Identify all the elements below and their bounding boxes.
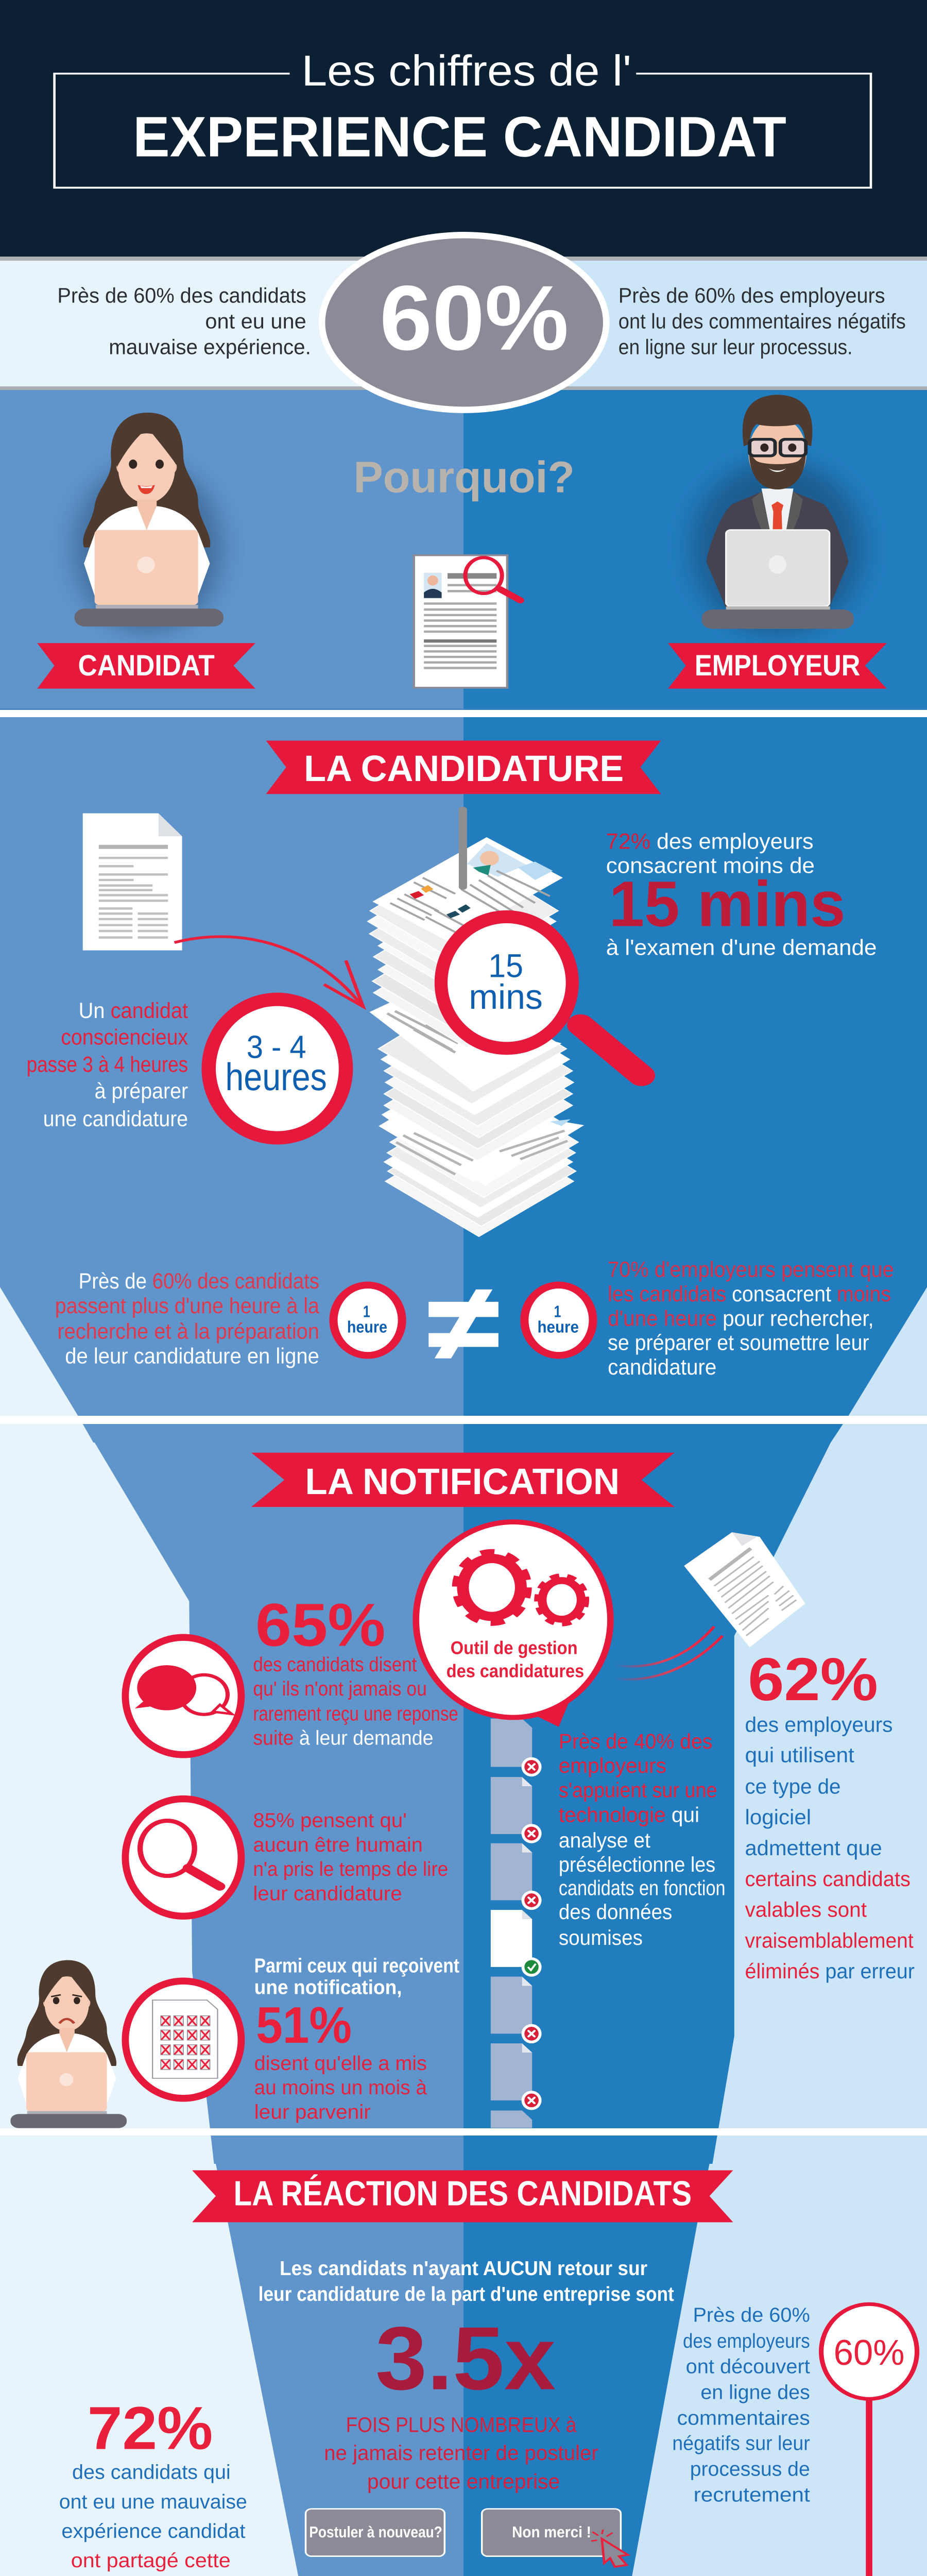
text: 72% employeurs 15 mins [606, 829, 877, 960]
illustration: employer man [692, 395, 863, 635]
heading ribbon: la réaction [192, 2171, 733, 2222]
heading ribbon: la notification: LA NOTIFICATION [305, 1461, 620, 1502]
text: 70% employeurs [608, 1258, 894, 1380]
illustration: sad candidate [10, 1960, 127, 2128]
timeline: 60%: commentaires [677, 2406, 810, 2429]
heading ribbon: la candidature [266, 741, 661, 794]
icon: not equal [428, 1290, 499, 1359]
timeline: 60%: Près de 60% [693, 2303, 810, 2326]
text: 40% employeurs: employeurs [559, 1754, 666, 1777]
text: 40% employeurs: technologie qui [559, 1803, 699, 1827]
stat: 62%: logiciel [745, 1805, 811, 1829]
icon: resume with magnifier [414, 555, 520, 688]
heading ribbon: la notification [251, 1453, 675, 1507]
stat: 62%: 62% [748, 1646, 878, 1713]
stat: 51%: au moins un mois à [254, 2076, 427, 2099]
badge: 3-4 heures: heures [225, 1055, 327, 1098]
timeline: 60%: processus de [690, 2458, 810, 2480]
badge: 1 heure right: heure [538, 1317, 579, 1336]
timeline: 60%: en ligne des [700, 2381, 810, 2403]
text: 40% employeurs: analyse et [559, 1828, 650, 1852]
left band text: ont eu une [205, 309, 306, 333]
left band text [57, 283, 311, 359]
arrow: document to stack [175, 937, 363, 1007]
stat: 51% [254, 1955, 459, 2123]
icon: rejected document [122, 1977, 245, 2102]
heading: pourquoi: Pourquoi? [354, 453, 575, 502]
stat: 72%: expérience candidat [61, 2520, 245, 2543]
text: 85%: leur candidature [253, 1883, 402, 1905]
text: aucun retour [259, 2257, 674, 2306]
button: postuler à nouveau [306, 2509, 444, 2556]
timeline: 60%: des employeurs [683, 2330, 810, 2352]
text: 85%: aucun être humain [253, 1834, 423, 1856]
stat: 51%: leur parvenir [254, 2101, 371, 2123]
column of resumes [491, 1719, 542, 2128]
stat: 62% [745, 1646, 915, 1983]
panel: la réaction des candidats [15, 2171, 917, 2576]
timeline: 60%: négatifs sur leur [672, 2432, 810, 2454]
panel: 60% stat band [57, 232, 906, 413]
title line 1: Les chiffres de l' [301, 46, 631, 95]
badge: 3-4 heures [201, 993, 353, 1144]
text: 60% des candidats: Près de 60% des candidats [79, 1269, 319, 1294]
badge: 1 heure left: 1 [363, 1302, 370, 1320]
text: 60% des candidats: recherche et à la préparation [57, 1319, 319, 1344]
icon: magnifier 15 mins: mins [469, 977, 543, 1016]
stat: 72%: des candidats qui [72, 2461, 231, 2484]
text: 72% employeurs 15 mins: consacrent moins de [606, 854, 815, 878]
right band text [619, 283, 906, 359]
button: non merci: Non merci ! [512, 2523, 591, 2541]
text: 70% employeurs: les candidats consacrent moins [608, 1282, 891, 1307]
text: candidat consciencieux: une candidature [43, 1107, 188, 1131]
60% badge [319, 232, 610, 413]
callout: outil de gestion: Outil de gestion [451, 1638, 578, 1658]
text: 40% employeurs: des données [559, 1900, 672, 1924]
stat: 51%: 51% [256, 1996, 352, 2054]
heading ribbon: la réaction: LA RÉACTION DES CANDIDATS [233, 2174, 692, 2213]
icon: cursor [591, 2530, 628, 2567]
arrow: signal lines [615, 1626, 723, 1680]
callout: outil de gestion [413, 1519, 614, 1727]
text: aucun retour: Les candidats n'ayant AUCUN retour sur [280, 2257, 647, 2280]
stat: 65%: des candidats disent [253, 1653, 417, 1676]
stat: 62%: ce type de [745, 1774, 840, 1798]
stat: 65%: rarement reçu une reponse [253, 1702, 458, 1725]
timeline: 60%: ont découvert [686, 2355, 810, 2378]
ribbon: employeur [668, 643, 887, 689]
left band text: mauvaise expérience. [109, 335, 311, 359]
button: non merci [482, 2509, 621, 2556]
icon: rotated document [684, 1532, 805, 1647]
stat: 72%: ont eu une mauvaise [59, 2490, 247, 2513]
text: fois plus nombreux: ne jamais retenter de postuler [324, 2441, 598, 2465]
icon: magnifier 15 mins [435, 910, 642, 1076]
text: 85% [253, 1809, 448, 1905]
text: 70% employeurs: d'une heure pour rechercher, [608, 1307, 874, 1331]
text: 85%: n'a pris le temps de lire [253, 1858, 448, 1880]
text: 72% employeurs 15 mins: 15 mins [609, 868, 846, 940]
stat: 65%: qu' ils n'ont jamais ou [253, 1677, 427, 1700]
stat: 72%: ont partagé cette [71, 2549, 231, 2572]
stat: 3.5x: 3.5x [375, 2308, 556, 2409]
stat: 65% [253, 1591, 458, 1750]
stat: 51%: disent qu'elle a mis [254, 2052, 427, 2075]
stat: 65%: 65% [255, 1591, 385, 1659]
panel: header title [55, 46, 871, 188]
text: aucun retour: leur candidature de la part d'une entreprise sont [259, 2283, 674, 2306]
heading ribbon: la candidature: LA CANDIDATURE [304, 748, 624, 789]
icon: magnifier 15 mins: 15 [488, 947, 523, 985]
button: postuler à nouveau: Postuler à nouveau? [309, 2523, 442, 2541]
stat: 72% [19, 2394, 288, 2576]
text: 40% employeurs: Près de 40% des [559, 1729, 712, 1753]
ribbon: candidat: CANDIDAT [78, 649, 215, 682]
text: 40% employeurs: candidats en fonction [559, 1876, 726, 1900]
ribbon: candidat [37, 643, 255, 689]
panel: la notification [10, 1453, 915, 2128]
icon: chat bubbles [122, 1634, 245, 1758]
text: fois plus nombreux [324, 2413, 598, 2493]
badge: 1 heure right [520, 1282, 597, 1359]
text: 40% employeurs: soumises [559, 1926, 643, 1950]
illustration: candidate woman [74, 413, 224, 633]
text: candidat consciencieux: consciencieux [61, 1025, 188, 1050]
stat: 51%: Parmi ceux qui reçoivent [254, 1955, 459, 1977]
text: 70% employeurs: candidature [608, 1355, 716, 1380]
panel: la candidature [27, 741, 894, 1380]
text: 40% employeurs: s'appuient sur une [559, 1778, 717, 1802]
icon: document [83, 814, 182, 951]
text: 85%: 85% pensent qu' [253, 1809, 407, 1832]
illustration: stack of resumes [368, 807, 584, 1236]
stat: 62%: valables sont [745, 1897, 867, 1922]
text: candidat consciencieux [27, 998, 188, 1131]
timeline: 60% [672, 2303, 917, 2506]
badge: 3-4 heures: 3 - 4 [247, 1029, 306, 1065]
text: candidat consciencieux: passe 3 à 4 heures [27, 1053, 188, 1077]
text: 40% employeurs: présélectionne les [559, 1853, 715, 1876]
callout: outil de gestion: des candidatures [447, 1661, 584, 1681]
icon: gears [458, 1553, 586, 1623]
text: 40% employeurs [559, 1729, 726, 1950]
text: 60% des candidats [55, 1269, 319, 1368]
stat: 62%: qui utilisent [745, 1743, 854, 1767]
timeline: 60%: recrutement [694, 2484, 810, 2506]
stat: 65%: suite à leur demande [253, 1727, 433, 1750]
text: 60% des candidats: passent plus d'une heure à la [55, 1294, 319, 1318]
icon: magnifier [122, 1795, 245, 1920]
left band text: Près de 60% des candidats [57, 283, 306, 307]
stat: 51%: une notification, [254, 1976, 402, 1999]
badge: 1 heure right: 1 [554, 1302, 561, 1320]
stat: 72%: 72% [88, 2394, 213, 2462]
stat: 62%: admettent que [745, 1836, 882, 1860]
text: candidat consciencieux: Un candidat [79, 998, 188, 1023]
text: fois plus nombreux: FOIS PLUS NOMBREUX à [346, 2413, 577, 2436]
badge: 1 heure left [329, 1282, 406, 1359]
text: 60% des candidats: de leur candidature en ligne [65, 1344, 319, 1368]
timeline: 60%: 60% [834, 2332, 904, 2372]
text: candidat consciencieux: à préparer [95, 1079, 188, 1104]
badge: 1 heure left: heure [347, 1317, 387, 1336]
60% badge: 60% [380, 267, 569, 369]
text: fois plus nombreux: pour cette entreprise [367, 2469, 560, 2493]
panel: pourquoi [37, 395, 887, 689]
text: 72% employeurs 15 mins: 72% des employeurs [606, 829, 814, 854]
timeline connector [866, 2398, 872, 2576]
